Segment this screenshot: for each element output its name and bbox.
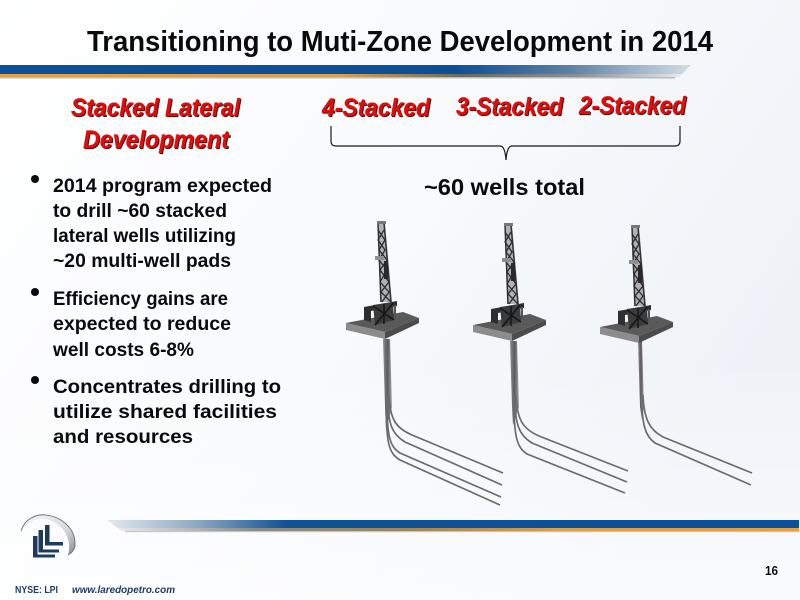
heading: stacked lateral development: Development <box>83 126 231 154</box>
top header bar <box>0 65 691 78</box>
bullet 2: expected to reduce <box>53 314 231 335</box>
bracket <box>331 126 680 160</box>
bullet 3: utilize shared facilities <box>53 402 277 423</box>
bullet 3 <box>31 376 281 448</box>
bullet list <box>31 175 281 448</box>
title: Transitioning to Muti-Zone Development in 2014 <box>87 26 713 58</box>
footer ticker: NYSE: LPI <box>15 585 58 596</box>
heading: stacked lateral development <box>71 94 241 154</box>
well diagram: 4-stacked <box>346 221 503 505</box>
label: 2-stacked: 2-Stacked <box>578 92 687 120</box>
well diagram: 2-stacked <box>600 225 752 485</box>
bullet 1: to drill ~60 stacked <box>53 201 227 222</box>
bullet 1 <box>31 175 272 272</box>
bullet 1: lateral wells utilizing <box>53 226 236 247</box>
company logo <box>21 515 75 558</box>
wells total label: ~60 wells total <box>424 174 585 200</box>
label: 4-stacked: 4-Stacked <box>321 94 431 122</box>
heading: stacked lateral development: Stacked Lateral <box>71 94 241 122</box>
well diagram: 3-stacked <box>473 223 628 493</box>
footer website: www.laredopetro.com <box>72 585 175 596</box>
bottom bar <box>107 520 799 532</box>
page number: 16 <box>765 564 778 578</box>
bullet 2: well costs 6-8% <box>52 340 194 361</box>
bullet 1: ~20 multi-well pads <box>53 251 231 272</box>
bullet 3: Concentrates drilling to <box>53 377 281 398</box>
bullet 2 <box>31 288 231 361</box>
label: 3-stacked: 3-Stacked <box>456 93 564 121</box>
bullet 2: Efficiency gains are <box>53 289 228 310</box>
bullet 3: and resources <box>53 427 193 448</box>
bullet 1: 2014 program expected <box>53 176 272 197</box>
